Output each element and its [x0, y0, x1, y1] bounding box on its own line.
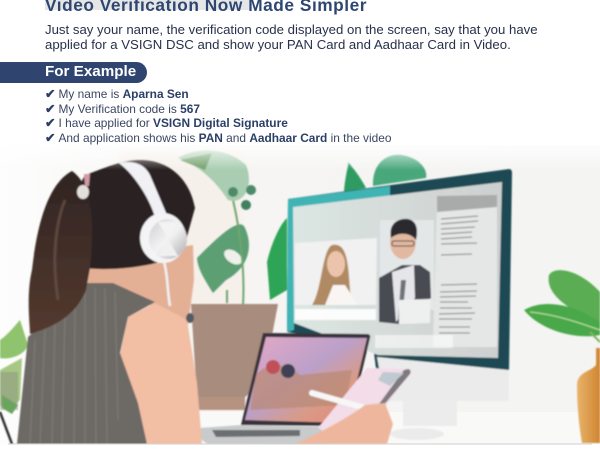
photo background wall	[0, 145, 600, 444]
window blinds	[120, 150, 242, 305]
intro paragraph: Just say your name, the verification code displayed on the screen, say that you have	[45, 22, 538, 37]
amber vase	[577, 348, 600, 443]
hand	[295, 403, 393, 444]
sleeveless top	[17, 283, 155, 444]
potted plant on the left of monitor	[178, 150, 256, 305]
sidebar panel with lorem text	[433, 195, 497, 347]
bottom white strip	[8, 444, 592, 450]
hair tie	[77, 185, 89, 199]
desk surface	[190, 412, 600, 444]
translucent UI strips	[295, 309, 376, 320]
headband	[119, 162, 167, 217]
example checklist: ✔	[45, 102, 55, 116]
example checklist: ✔	[45, 130, 55, 144]
headphone cable	[164, 262, 170, 306]
shoulder and arm	[120, 303, 202, 444]
example checklist	[45, 87, 391, 144]
example checklist: And application shows his PAN and Aadhaar Card in the video	[58, 130, 391, 144]
right plant	[524, 270, 600, 342]
ear cup	[140, 213, 187, 263]
example checklist: ✔	[45, 116, 55, 130]
monitor screen	[293, 182, 502, 358]
rib texture	[30, 288, 118, 444]
example checklist: ✔	[45, 87, 55, 101]
example checklist: My Verification code is 567	[58, 102, 200, 116]
mouse	[390, 428, 444, 440]
monitor	[287, 169, 512, 401]
man on video call	[379, 219, 434, 324]
chair edge bottom left	[0, 412, 12, 444]
tablet	[318, 368, 411, 432]
stylus	[312, 393, 365, 408]
neck and face	[87, 245, 194, 325]
monitor stand	[403, 398, 457, 426]
ponytail	[29, 171, 92, 334]
example checklist: My name is Aparna Sen	[58, 87, 189, 101]
head hair	[74, 160, 195, 269]
example checklist: I have applied for VSIGN Digital Signature	[58, 116, 288, 130]
top fade of photo into white	[0, 140, 600, 170]
woman from behind	[17, 160, 202, 444]
section pill: For Example: For Example	[45, 63, 136, 80]
laptop	[200, 333, 370, 445]
terracotta pot	[191, 304, 278, 410]
intro paragraph	[45, 22, 538, 52]
laptop screen	[245, 337, 367, 423]
woman on video call	[295, 238, 377, 305]
watch	[186, 313, 194, 323]
intro paragraph: applied for a VSIGN DSC and show your PAN Card and Aadhaar Card in Video.	[45, 37, 511, 52]
small plant bottom left	[0, 320, 28, 414]
plant behind monitor	[267, 155, 426, 300]
section pill: For Example	[0, 62, 147, 83]
